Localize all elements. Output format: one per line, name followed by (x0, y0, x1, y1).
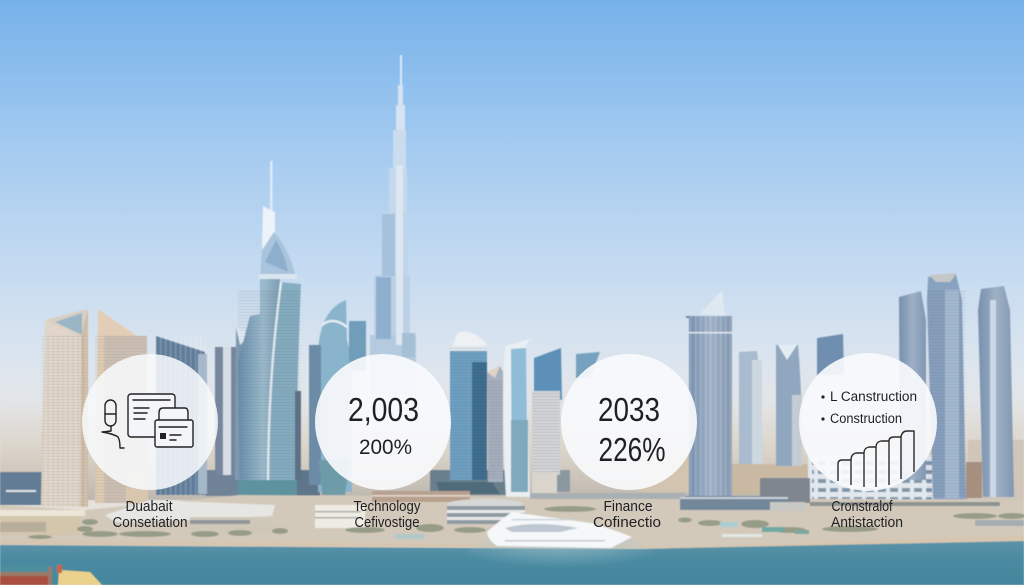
label second line: Cefivostige (354, 514, 420, 531)
circle badge (315, 354, 451, 490)
low-rise buildings (0, 491, 1024, 535)
tower: tall steel centre right (682, 290, 782, 500)
bullet one: L Canstruction (830, 389, 917, 404)
big number: 2,003 (348, 391, 419, 428)
tower: burj spire (370, 55, 416, 395)
tower: twisted spire (238, 161, 301, 498)
distant haze city (0, 400, 1024, 505)
label: Technology (354, 498, 421, 515)
label: Cronstralof (832, 498, 893, 515)
label second line: Cofinectio (593, 514, 661, 531)
percentage: 200% (359, 436, 412, 459)
white yacht (487, 512, 632, 548)
icon: documents and pen (102, 394, 193, 448)
circle badge (799, 353, 937, 491)
label second line: Antistaction (831, 514, 903, 531)
tower: peach second (95, 309, 148, 504)
water reflection (465, 532, 655, 580)
towers: slim pair left of twisted tower (215, 327, 252, 480)
tower: small beige beside capped (487, 366, 503, 482)
tower: beige left (41, 309, 88, 507)
panel: Finance (561, 354, 697, 531)
percentage: 226% (598, 431, 666, 468)
shoreline promenade (0, 535, 1024, 548)
bullet two: Construction (830, 411, 902, 426)
label second line: Consetiation (112, 514, 188, 531)
tower: blue behind and cream front (532, 348, 600, 493)
tower: blue cluster behind first circle (156, 336, 207, 496)
tower: dome blue (309, 300, 366, 495)
panel: Technology (315, 354, 451, 531)
label: Finance (604, 498, 652, 515)
palm and planting strip (28, 506, 1024, 539)
panel: Dubai consultation (82, 354, 218, 531)
icon: rising bar chart (838, 431, 914, 487)
tower: curved glass white frame (503, 338, 533, 497)
teal roofs (395, 522, 809, 539)
moored boat bottom left (0, 565, 102, 585)
panel: Construction (799, 353, 937, 531)
big number: 2033 (598, 391, 660, 428)
waterfront ground (0, 495, 1024, 549)
tower: blue behind fourth circle (808, 334, 933, 503)
mid-distance buildings (530, 478, 1000, 511)
water (0, 541, 1024, 585)
circle badge (561, 354, 697, 490)
towers: twin tapered (739, 345, 802, 466)
tower: capped blue (436, 331, 500, 494)
tower: right trio (899, 273, 1014, 499)
circle badge (82, 354, 218, 490)
label: Duabait (126, 498, 173, 515)
